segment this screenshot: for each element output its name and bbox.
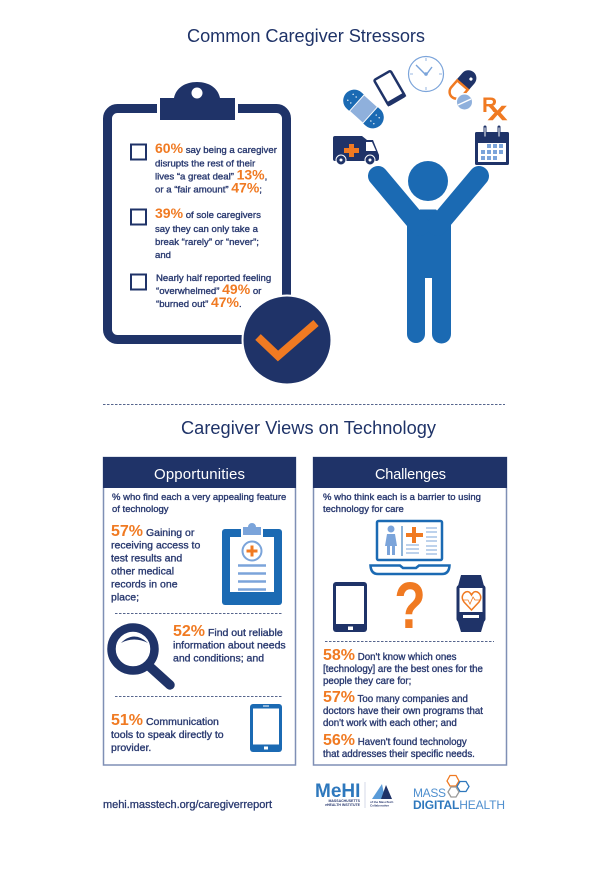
heading: caregiver views on technology: Caregiver Views on Technology <box>181 418 437 438</box>
logo: MeHI: MeHI <box>315 781 360 802</box>
barrier 57 line 2: doctors have their own programs that <box>323 706 483 717</box>
panel: clipboard of stressors <box>108 82 332 386</box>
stressor text 1 line 2: disrupts the rest of their <box>155 158 256 170</box>
logo: Mass Digital Health <box>413 776 505 812</box>
logo: Mass Digital Health: DIGITALHEALTH <box>413 798 505 812</box>
stat 56 percent: 56% Haven't found technology <box>323 732 467 749</box>
panel: challenges <box>313 457 507 765</box>
logo: MeHI: of the MassTech <box>370 800 393 804</box>
stat 52 percent: 52% Find out reliable <box>173 623 283 640</box>
stat 57 line 3: test results and <box>111 552 182 564</box>
icon: magnifying glass <box>112 628 170 685</box>
stat 51 percent: 51% Communication <box>111 712 219 729</box>
opportunities header <box>103 457 296 488</box>
stressor text 2 line 3: break “rarely” or “never”; <box>155 237 259 248</box>
logo: MeHI: Collaborative <box>370 804 389 808</box>
checkbox 2 <box>131 210 146 224</box>
logo: Mass Digital Health: MASS <box>413 786 446 800</box>
stressor text 1 line 3: lives “a great deal” 13%, <box>155 166 267 182</box>
stat 58 line 2: [technology] are the best ones for the <box>323 664 483 675</box>
icon: clock <box>408 56 444 92</box>
opportunities header: Opportunities <box>154 466 245 483</box>
stat 52 line 2: information about needs <box>173 640 286 652</box>
icon: prescription Rx: R <box>482 94 497 117</box>
icon: bandage <box>339 85 388 133</box>
stat 57 line 5: records in one <box>111 578 178 590</box>
stressor text 1 line 4: or a “fair amount” 47%; <box>155 180 262 196</box>
clipboard board <box>108 82 286 340</box>
stat 57 percent: 57% Gaining or <box>111 523 195 540</box>
stat 58 line 3: people they care for; <box>323 676 411 687</box>
logo: MeHI <box>315 781 393 808</box>
challenges intro: % who think each is a barrier to using <box>323 492 481 503</box>
stressor text 3 line 2: “overwhelmed” 49% or <box>156 281 262 297</box>
opportunities intro line 2: of technology <box>112 504 169 515</box>
icon: smartwatch <box>456 575 486 632</box>
challenges header: Challenges <box>375 467 446 483</box>
stat 58 percent: 58% Don't know which ones <box>323 647 457 664</box>
stressor text 2 line 4: and <box>155 250 171 261</box>
footer url: mehi.masstech.org/caregiverreport <box>103 799 272 811</box>
checkbox 1 <box>131 144 146 160</box>
stressor text 1: 60% say being a caregiver <box>155 140 278 156</box>
logo: MeHI: eHEALTH INSTITUTE <box>325 803 361 807</box>
icon: prescription Rx <box>482 94 508 125</box>
opportunities intro: % who find each a very appealing feature <box>112 492 286 503</box>
icon: smartphone <box>250 704 282 752</box>
stressor text 3 line 3: “burned out” 47%. <box>156 294 242 310</box>
stat 57 percent barrier: 57% Too many companies and <box>323 689 468 706</box>
icon: prescription Rx: X <box>488 103 508 125</box>
icon: medical record clipboard <box>222 523 282 605</box>
icon: calendar <box>475 127 509 165</box>
stat 57 line 2: receiving access to <box>111 540 200 552</box>
icon: check mark badge <box>242 294 332 386</box>
stat 52 line 3: and conditions; and <box>173 652 264 664</box>
stressor text 3: Nearly half reported feeling <box>156 273 271 284</box>
stressor text 2 line 2: say they can only take a <box>155 224 259 235</box>
barrier 57 line 3: don't work with each other; and <box>323 718 457 729</box>
icon: pills <box>446 67 480 111</box>
stat 51 line 3: provider. <box>111 742 151 754</box>
icon: juggling caregiver figure <box>378 161 479 344</box>
title: common caregiver stressors: Common Caregiver Stressors <box>187 26 425 46</box>
panel: opportunities <box>103 457 296 765</box>
stat 57 line 6: place; <box>111 592 139 604</box>
icon: tablet device <box>333 582 367 632</box>
stat 51 line 2: tools to speak directly to <box>111 729 224 741</box>
icon: question mark: ? <box>394 568 426 642</box>
challenges intro line 2: technology for care <box>323 504 404 515</box>
stat 56 line 2: that addresses their specific needs. <box>323 749 475 760</box>
stressor text 2: 39% of sole caregivers <box>155 205 261 221</box>
icon: tablet <box>373 70 406 107</box>
challenges header <box>313 457 507 488</box>
stat 57 line 4: other medical <box>111 566 174 578</box>
logo: MeHI: MASSACHUSETTS <box>328 799 361 803</box>
icon: ambulance <box>333 136 379 165</box>
icon: laptop with medical chart <box>370 521 450 574</box>
checkbox 3 <box>131 274 146 290</box>
